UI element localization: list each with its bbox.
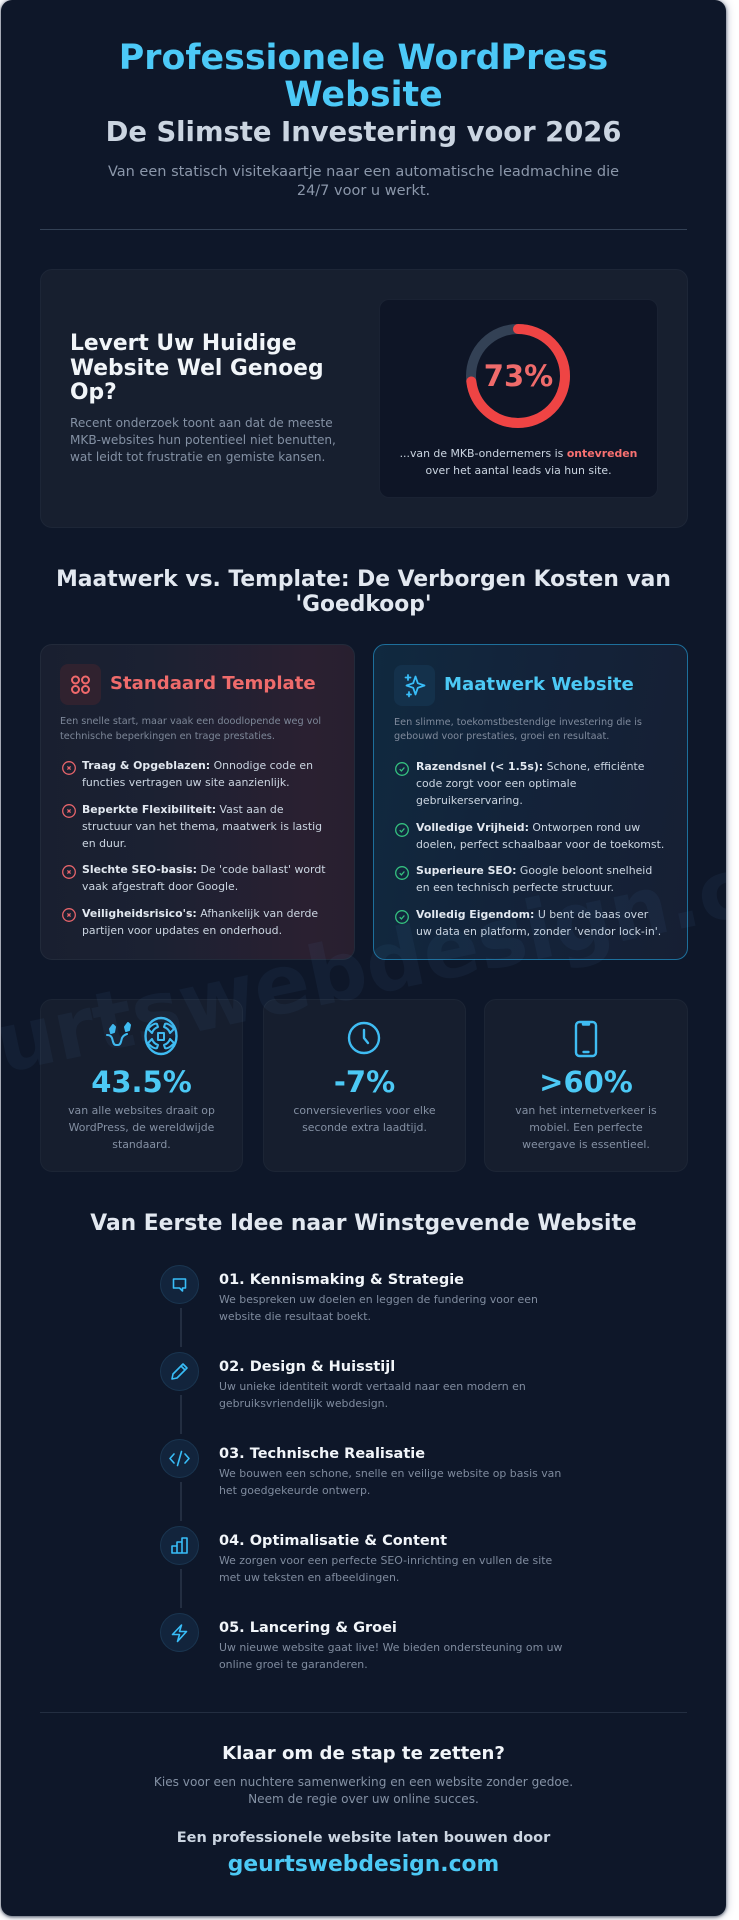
donut caption — [400, 447, 637, 477]
text: conversion loss — [293, 1104, 436, 1134]
step 5 title: 05. Lancering & Groei — [219, 1620, 397, 1636]
text: wordpress share: van alle websites draait op — [68, 1104, 215, 1116]
heading: maatwerk vs template: Maatwerk vs. Template: De Verborgen Kosten van — [56, 567, 671, 592]
item: seo — [416, 864, 652, 894]
icon: check — [395, 866, 409, 880]
icon: template grid — [60, 664, 101, 705]
step 2 text: gebruiksvriendelijk webdesign. — [219, 1396, 388, 1410]
value: 43.5 percent: 43.5% — [91, 1065, 192, 1099]
item: razendsnel: code zorgt voor een optimale — [416, 777, 576, 790]
icon: check — [395, 762, 409, 776]
item: traag — [82, 759, 313, 789]
icon: cross — [62, 908, 76, 922]
heading: current website: Website Wel Genoeg — [70, 356, 324, 380]
list: maatwerk benefits — [395, 760, 664, 938]
item: razendsnel: gebruikerservaring. — [416, 794, 523, 807]
intro text — [108, 164, 619, 199]
text: mobile traffic — [515, 1104, 657, 1150]
step 3 text: We bouwen een schone, snelle en veilige website op basis van — [219, 1466, 561, 1480]
item: seo: Slechte SEO-basis: De 'code ballast' wordt — [82, 863, 326, 876]
panel: stat wordpress — [40, 999, 243, 1172]
step 1 text: website die resultaat boekt. — [219, 1310, 371, 1322]
heading: maatwerk website: Maatwerk Website — [444, 674, 634, 694]
step 2 text: Uw unieke identiteit wordt vertaald naar een modern en — [219, 1380, 526, 1392]
text: call to action: Kies voor een nuchtere samenwerking en een website zonder gedoe. — [154, 1774, 573, 1788]
heading: standaard template: Standaard Template — [110, 673, 316, 694]
intro text: Van een statisch visitekaartje naar een automatische leadmachine die — [108, 164, 619, 180]
panel: standaard template — [40, 644, 355, 960]
title — [119, 38, 608, 115]
divider — [40, 1712, 687, 1713]
text: mobile traffic: weergave is essentieel. — [522, 1138, 650, 1150]
item: eigendom — [416, 908, 661, 938]
icon: sparkles — [394, 665, 435, 706]
text: research: MKB-websites hun potentieel niet benutten, — [70, 433, 336, 447]
item: flexibiliteit: structuur van het thema, maatwerk is lastig — [82, 820, 322, 832]
step 4 text — [219, 1554, 552, 1584]
step 3 title: 03. Technische Realisatie — [219, 1446, 425, 1462]
heading: current website — [70, 331, 324, 405]
item: veiligheid: partijen voor updates en onderhoud. — [82, 924, 282, 937]
item: veiligheid: Veiligheidsrisico's: Afhankelijk van derde — [82, 907, 318, 920]
step 1 icon: chat — [160, 1264, 199, 1304]
text: research: wat leidt tot frustratie en gemiste kansen. — [70, 450, 325, 464]
title: Website — [284, 75, 443, 115]
step 1 title: 01. Kennismaking & Strategie — [219, 1272, 464, 1288]
text: conversion loss: conversieverlies voor elke — [293, 1104, 436, 1116]
donut caption: over het aantal leads via hun site. — [425, 464, 612, 477]
item: eigendom: Volledig Eigendom: U bent de baas over — [416, 908, 648, 920]
step 5 text: Uw nieuwe website gaat live! We bieden ondersteuning om uw — [219, 1640, 562, 1654]
step 3 icon: code — [160, 1438, 199, 1478]
item: flexibiliteit: Beperkte Flexibiliteit: Vast aan de — [82, 802, 284, 816]
panel: 73 percent stat — [379, 299, 658, 498]
text: template intro — [60, 716, 321, 742]
step 2 icon: pencil — [160, 1352, 199, 1390]
divider — [40, 229, 687, 230]
text: wordpress share: standaard. — [112, 1138, 171, 1150]
text: template intro: Een snelle start, maar vaak een doodlopende weg vol — [60, 716, 321, 727]
item: seo: en een technisch perfecte structuur. — [416, 881, 614, 894]
step 2 text — [219, 1380, 526, 1410]
text: maatwerk intro: gebouwd voor prestaties, groei en resultaat. — [394, 731, 609, 742]
title: Professionele WordPress — [119, 38, 608, 78]
item: flexibiliteit — [82, 802, 322, 850]
item: traag: Traag & Opgeblazen: Onnodige code en — [82, 759, 313, 772]
text: research — [70, 416, 336, 464]
panel: current website problem — [40, 269, 688, 528]
heading: current website: Op? — [70, 380, 117, 405]
value: over 60 percent: >60% — [539, 1065, 633, 1099]
item: seo — [82, 863, 326, 893]
heading: maatwerk vs template — [56, 567, 671, 617]
item: vrijheid: Volledige Vrijheid: Ontworpen rond uw — [416, 820, 640, 834]
icon: check — [395, 823, 409, 837]
heading: current website: Levert Uw Huidige — [70, 331, 297, 356]
text: wordpress share — [68, 1104, 215, 1150]
list: template downsides — [62, 759, 326, 937]
intro text: 24/7 voor u werkt. — [297, 183, 430, 199]
step 3 text: het goedgekeurde ontwerp. — [219, 1484, 370, 1496]
step 5 icon: lightning — [160, 1612, 199, 1652]
item: seo: vaak afgestraft door Google. — [82, 880, 238, 893]
icon: cross — [62, 804, 76, 818]
text: research: Recent onderzoek toont aan dat de meeste — [70, 416, 333, 430]
icon: cross — [62, 865, 76, 879]
step 4 text: met uw teksten en afbeeldingen. — [219, 1570, 399, 1584]
donut value: 73% — [484, 359, 553, 393]
icon: smartphone — [574, 1020, 598, 1058]
text: conversion loss: seconde extra laadtijd. — [302, 1120, 427, 1134]
text: template intro: technische beperkingen en trage prestaties. — [60, 730, 275, 742]
text: maatwerk intro — [394, 716, 642, 742]
text: call to action: Neem de regie over uw online succes. — [248, 1792, 479, 1806]
step 1 text: We bespreken uw doelen en leggen de fundering voor een — [219, 1292, 538, 1306]
icon: cross — [62, 761, 76, 775]
item: razendsnel — [416, 760, 644, 807]
step 3 text — [219, 1466, 561, 1496]
text: call to action — [154, 1774, 573, 1806]
step 5 text — [219, 1640, 562, 1670]
text: wordpress share: WordPress, de wereldwijde — [69, 1120, 214, 1134]
subtitle: De Slimste Investering voor 2026 — [106, 117, 621, 148]
icon: check — [395, 910, 409, 924]
step 1 text — [219, 1292, 538, 1322]
text: maatwerk intro: Een slimme, toekomstbestendige investering die is — [394, 716, 642, 728]
icon: clock — [348, 1022, 380, 1054]
item: vrijheid — [416, 820, 664, 850]
step 4 text: We zorgen voor een perfecte SEO-inrichting en vullen de site — [219, 1554, 552, 1566]
panel: stat mobile — [484, 999, 688, 1172]
text: built by: Een professionele website laten bouwen door — [177, 1830, 550, 1846]
donut chart: 73 percent — [466, 324, 570, 428]
value: minus 7 percent: -7% — [334, 1065, 395, 1099]
timeline — [160, 1265, 562, 1670]
item: vrijheid: doelen, perfect schaalbaar voor de toekomst. — [416, 838, 664, 850]
item: flexibiliteit: en duur. — [82, 836, 127, 850]
heading: maatwerk vs template: 'Goedkoop' — [295, 592, 432, 617]
step 4 icon: bar chart — [160, 1526, 199, 1564]
item: traag: functies vertragen uw site aanzienlijk. — [82, 776, 290, 789]
panel: stat speed — [263, 999, 466, 1172]
panel: maatwerk website — [373, 644, 688, 960]
heading: call to action: Klaar om de stap te zetten? — [222, 1743, 505, 1764]
step 2 title: 02. Design & Huisstijl — [219, 1359, 395, 1375]
text: mobile traffic: mobiel. Een perfecte — [529, 1120, 643, 1134]
item: eigendom: uw data en platform, zonder 'vendor lock-in'. — [416, 924, 661, 938]
step 4 title: 04. Optimalisatie & Content — [219, 1533, 447, 1549]
step 5 text: online groei te garanderen. — [219, 1658, 368, 1670]
item: razendsnel: Razendsnel (< 1.5s): Schone, efficiënte — [416, 760, 644, 773]
donut caption: ...van de MKB-ondernemers is ontevreden — [400, 447, 637, 460]
heading: process: Van Eerste Idee naar Winstgevende Website — [90, 1211, 637, 1236]
item: seo: Superieure SEO: Google beloont snelheid — [416, 864, 652, 877]
item: veiligheid — [82, 907, 318, 937]
text: mobile traffic: van het internetverkeer is — [515, 1104, 657, 1116]
icon: wordpress plug and wheel — [106, 1016, 178, 1056]
brand link: geurtswebdesign.com — [228, 1852, 499, 1877]
